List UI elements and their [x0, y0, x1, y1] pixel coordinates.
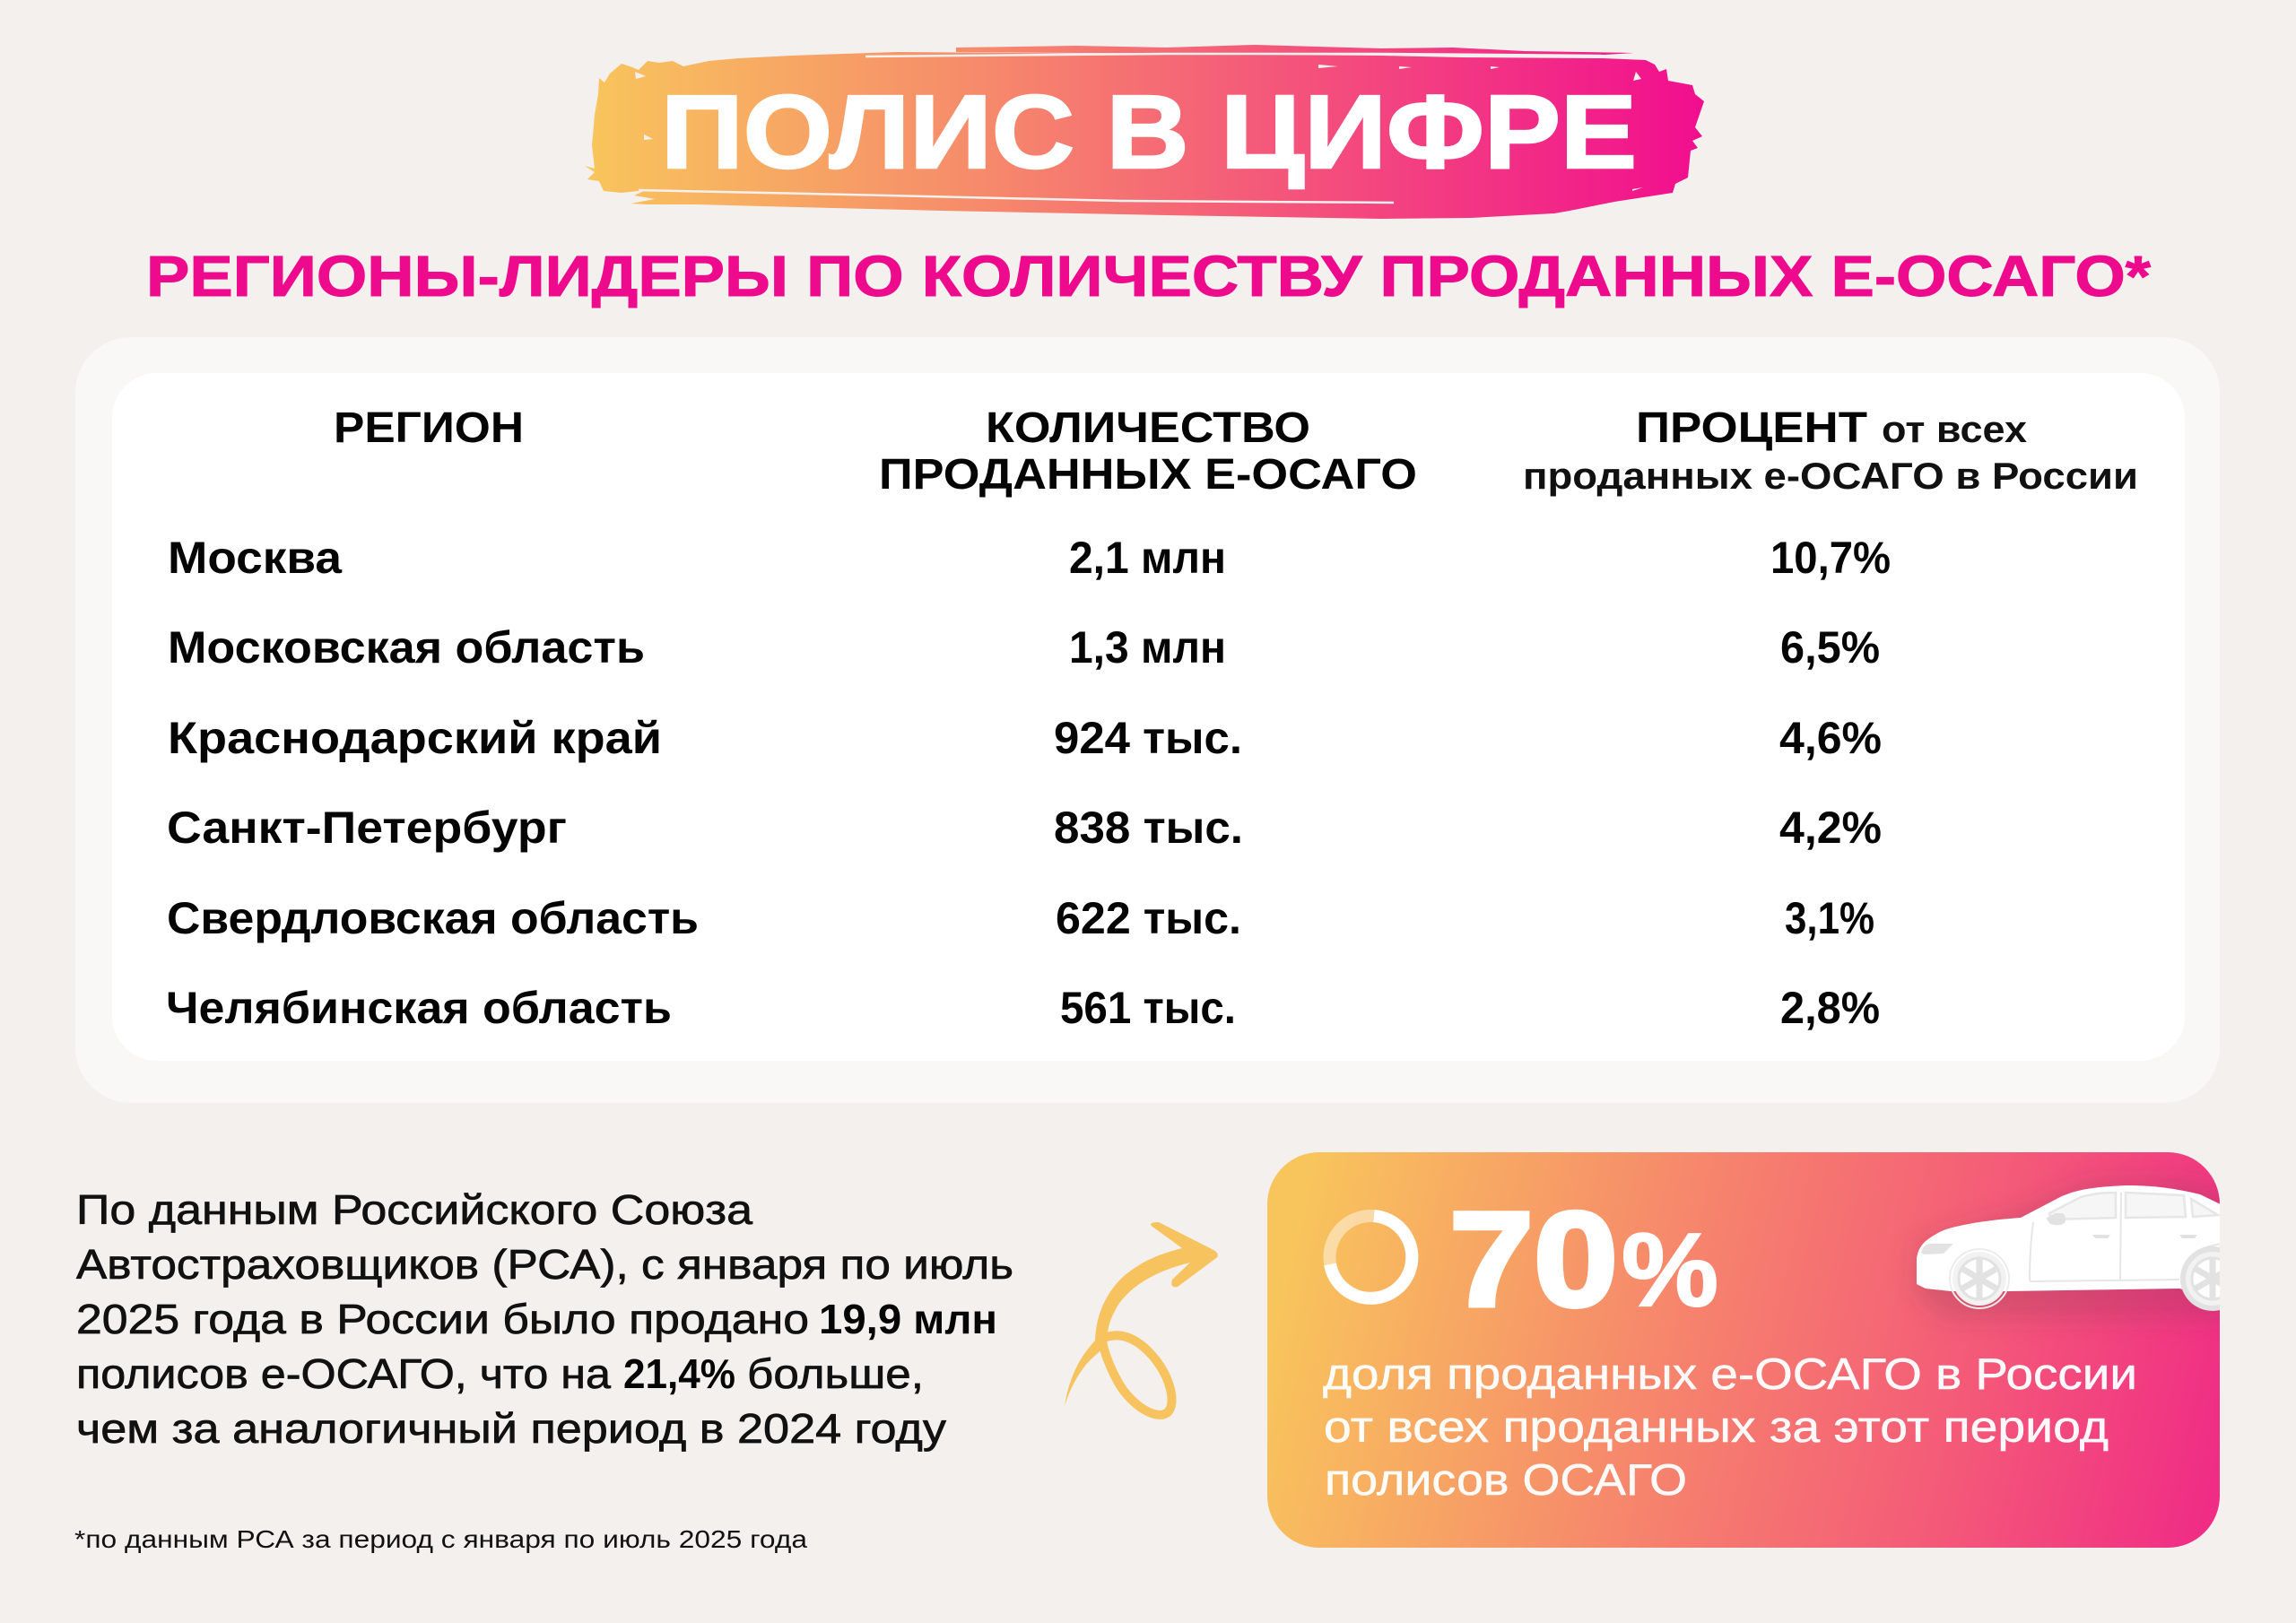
row: Sverdlovsk: 3,1% — [1785, 893, 1874, 943]
row: Moscow: Москва — [168, 533, 343, 583]
row: Saint Petersburg: 838 тыс. — [1054, 803, 1243, 853]
footnote: *по данным РСА за период с января по июль 2025 года — [74, 1525, 807, 1553]
header: percent: от всех — [1882, 408, 2028, 450]
row: Moscow region: 6,5% — [1780, 622, 1880, 673]
car windows — [2049, 1193, 2218, 1219]
header: percent — [1523, 404, 2138, 497]
row: Krasnodar: 924 тыс. — [1054, 713, 1242, 763]
row: Moscow region: Московская область — [168, 622, 645, 673]
arrow — [1065, 1222, 1218, 1415]
row: Moscow region — [168, 622, 1880, 673]
stat: 70% — [1449, 1184, 1718, 1334]
title banner — [585, 45, 1704, 219]
title text: ПОЛИС В ЦИФРЕ — [661, 74, 1637, 190]
row: Chelyabinsk: 561 тыс. — [1060, 983, 1236, 1033]
row: Sverdlovsk: Свердловская область — [167, 893, 699, 943]
card description: от всех проданных за этот период — [1324, 1403, 2109, 1452]
row: Chelyabinsk: Челябинская область — [166, 983, 672, 1033]
panel: 70 percent card — [1267, 1152, 2245, 1548]
text block: RSA summary: больше, — [747, 1350, 924, 1397]
row: Chelyabinsk: 2,8% — [1780, 983, 1880, 1033]
row: Krasnodar — [168, 713, 1882, 763]
icon: car — [1915, 1182, 2245, 1318]
row: Chelyabinsk — [166, 983, 1880, 1033]
brush stroke — [585, 45, 1704, 219]
row: Krasnodar: Краснодарский край — [168, 713, 662, 763]
panel outer frame — [75, 337, 2220, 1103]
header: quantity: КОЛИЧЕСТВО — [986, 404, 1310, 452]
header: region: РЕГИОН — [334, 404, 524, 452]
row: Saint Petersburg — [167, 803, 1882, 853]
car details — [1921, 1193, 2224, 1281]
card description — [1323, 1350, 2137, 1505]
panel inner card — [112, 373, 2185, 1061]
icon: progress ring — [1329, 1216, 1412, 1298]
row: Krasnodar: 4,6% — [1779, 713, 1882, 763]
stat: 70%: % — [1622, 1211, 1718, 1328]
row: Sverdlovsk — [167, 893, 1874, 943]
text block: RSA summary: По данным Российского Союза — [76, 1186, 752, 1233]
text block: RSA summary — [76, 1186, 1013, 1452]
header: quantity: ПРОДАННЫХ Е-ОСАГО — [879, 451, 1417, 499]
card background — [1267, 1152, 2220, 1548]
panel: table — [75, 337, 2220, 1103]
header: quantity — [879, 404, 1417, 499]
text block: RSA summary: полисов е-ОСАГО, что на — [76, 1350, 611, 1397]
text block: RSA summary: 2025 года в России было продано — [76, 1296, 809, 1342]
row: Sverdlovsk: 622 тыс. — [1056, 893, 1241, 943]
card description: доля проданных е-ОСАГО в России — [1323, 1350, 2137, 1399]
text block: RSA summary: 19,9 млн — [819, 1296, 997, 1342]
subtitle: РЕГИОНЫ-ЛИДЕРЫ ПО КОЛИЧЕСТВУ ПРОДАННЫХ Е-ОСАГО* — [146, 244, 2151, 308]
row: Moscow: 2,1 млн — [1069, 533, 1226, 583]
text block: RSA summary: 21,4% — [623, 1350, 735, 1397]
stat: 70%: 70 — [1449, 1184, 1618, 1334]
front wheel — [1950, 1249, 2009, 1308]
row: Saint Petersburg: 4,2% — [1779, 803, 1882, 853]
row: Moscow — [168, 533, 1891, 583]
text block: RSA summary: чем за аналогичный период в 2024 году — [76, 1405, 946, 1452]
card description: полисов ОСАГО — [1325, 1456, 1687, 1505]
text block: RSA summary: Автостраховщиков (РСА), с января по июль — [76, 1241, 1013, 1288]
header: percent: ПРОЦЕНТ — [1636, 404, 1867, 452]
rear wheel — [2180, 1246, 2245, 1311]
row: Moscow region: 1,3 млн — [1069, 622, 1226, 673]
row: Saint Petersburg: Санкт-Петербург — [167, 803, 567, 853]
row: Moscow: 10,7% — [1770, 533, 1891, 583]
header: percent: проданных е-ОСАГО в России — [1523, 455, 2138, 497]
